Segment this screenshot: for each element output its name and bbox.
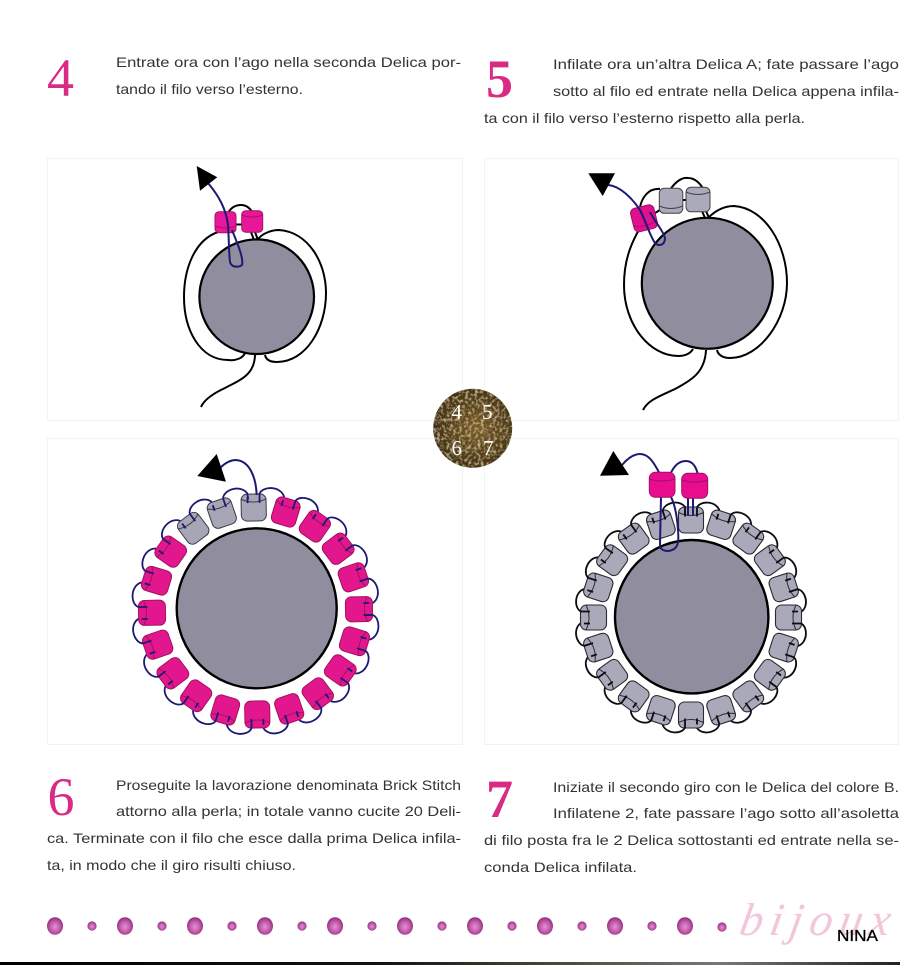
step 5 heading and text: [484, 49, 899, 126]
step 6 text: ta, in modo che il giro risulti chiuso.: [47, 857, 296, 873]
step 7 heading and text: [484, 769, 899, 875]
pearl disc: [199, 239, 314, 354]
step 7 text: conda Delica infilata.: [484, 859, 637, 875]
arrow: [197, 454, 226, 482]
step 5 text: [484, 56, 899, 126]
step 6 text: Proseguite la lavorazione denominata Brick Stitch: [116, 777, 461, 793]
pearl disc: [615, 540, 768, 693]
pearl disc: [642, 218, 773, 349]
decorative row of beads: [47, 917, 727, 935]
numeral 4: 4: [47, 48, 74, 108]
panel: step 5 diagram: [484, 158, 898, 420]
step 5 text: ta con il filo verso l’esterno rispetto alla perla.: [484, 110, 805, 126]
numeral 5: 5: [486, 49, 513, 109]
step 7 text: di filo posta fra le 2 Delica sottostanti ed entrate nella se-: [484, 832, 899, 848]
outer thread loops: [624, 178, 787, 410]
numeral 7: 7: [486, 769, 513, 829]
ring of 20 grey beads: [573, 499, 809, 736]
exit thread: [220, 460, 257, 495]
step 4 text: [116, 54, 461, 97]
needle thread: [608, 185, 665, 245]
pink bead: [629, 204, 659, 233]
panel: step 6 diagram: [48, 438, 462, 744]
step 5 text: Infilate ora un’altra Delica A; fate passare l’ago: [553, 56, 899, 72]
panel: step 4 diagram: [48, 158, 462, 420]
needle thread: [208, 183, 242, 267]
pink beads: [649, 472, 708, 498]
numeral 6: 6: [48, 767, 74, 827]
NINA label: NINA: [837, 928, 879, 945]
step 7 text: Infilatene 2, fate passare l’ago sotto all’asoletta: [553, 805, 899, 821]
step 4 heading and text: [47, 48, 461, 108]
step numbers: [452, 400, 494, 460]
step numbers: 6: [452, 436, 462, 460]
ring of 20 delica beads: [130, 485, 381, 737]
step 4 text: tando il filo verso l’esterno.: [116, 81, 303, 97]
step 6 text: [47, 777, 461, 873]
blue second round threads: [622, 454, 698, 551]
step 7 text: [484, 779, 899, 875]
step numbers: 7: [483, 436, 494, 460]
grey beads: [659, 187, 710, 213]
bijoux script logo: bijoux: [736, 895, 895, 946]
step 5 text: sotto al filo ed entrate nella Delica appena infila-: [553, 83, 899, 99]
bottom black bar: [0, 962, 900, 965]
step numbers: 4: [452, 400, 462, 424]
arrow: [588, 173, 615, 196]
step 7 text: Iniziate il secondo giro con le Delica del colore B.: [553, 779, 899, 795]
panel: step 7 diagram: [484, 438, 898, 744]
arrow: [600, 451, 629, 476]
outer thread loops: [184, 205, 326, 407]
step 6 text: ca. Terminate con il filo che esce dalla prima Delica infila-: [47, 830, 461, 846]
step 6 heading and text: [47, 767, 461, 873]
step numbers: 5: [482, 400, 492, 424]
step 6 text: attorno alla perla; in totale vanno cucite 20 Deli-: [116, 803, 461, 819]
pink beads: [215, 211, 263, 233]
centre gold badge: [433, 389, 512, 468]
step 4 text: Entrate ora con l’ago nella seconda Delica por-: [116, 54, 461, 70]
arrow: [197, 166, 217, 191]
pearl disc: [177, 528, 337, 688]
